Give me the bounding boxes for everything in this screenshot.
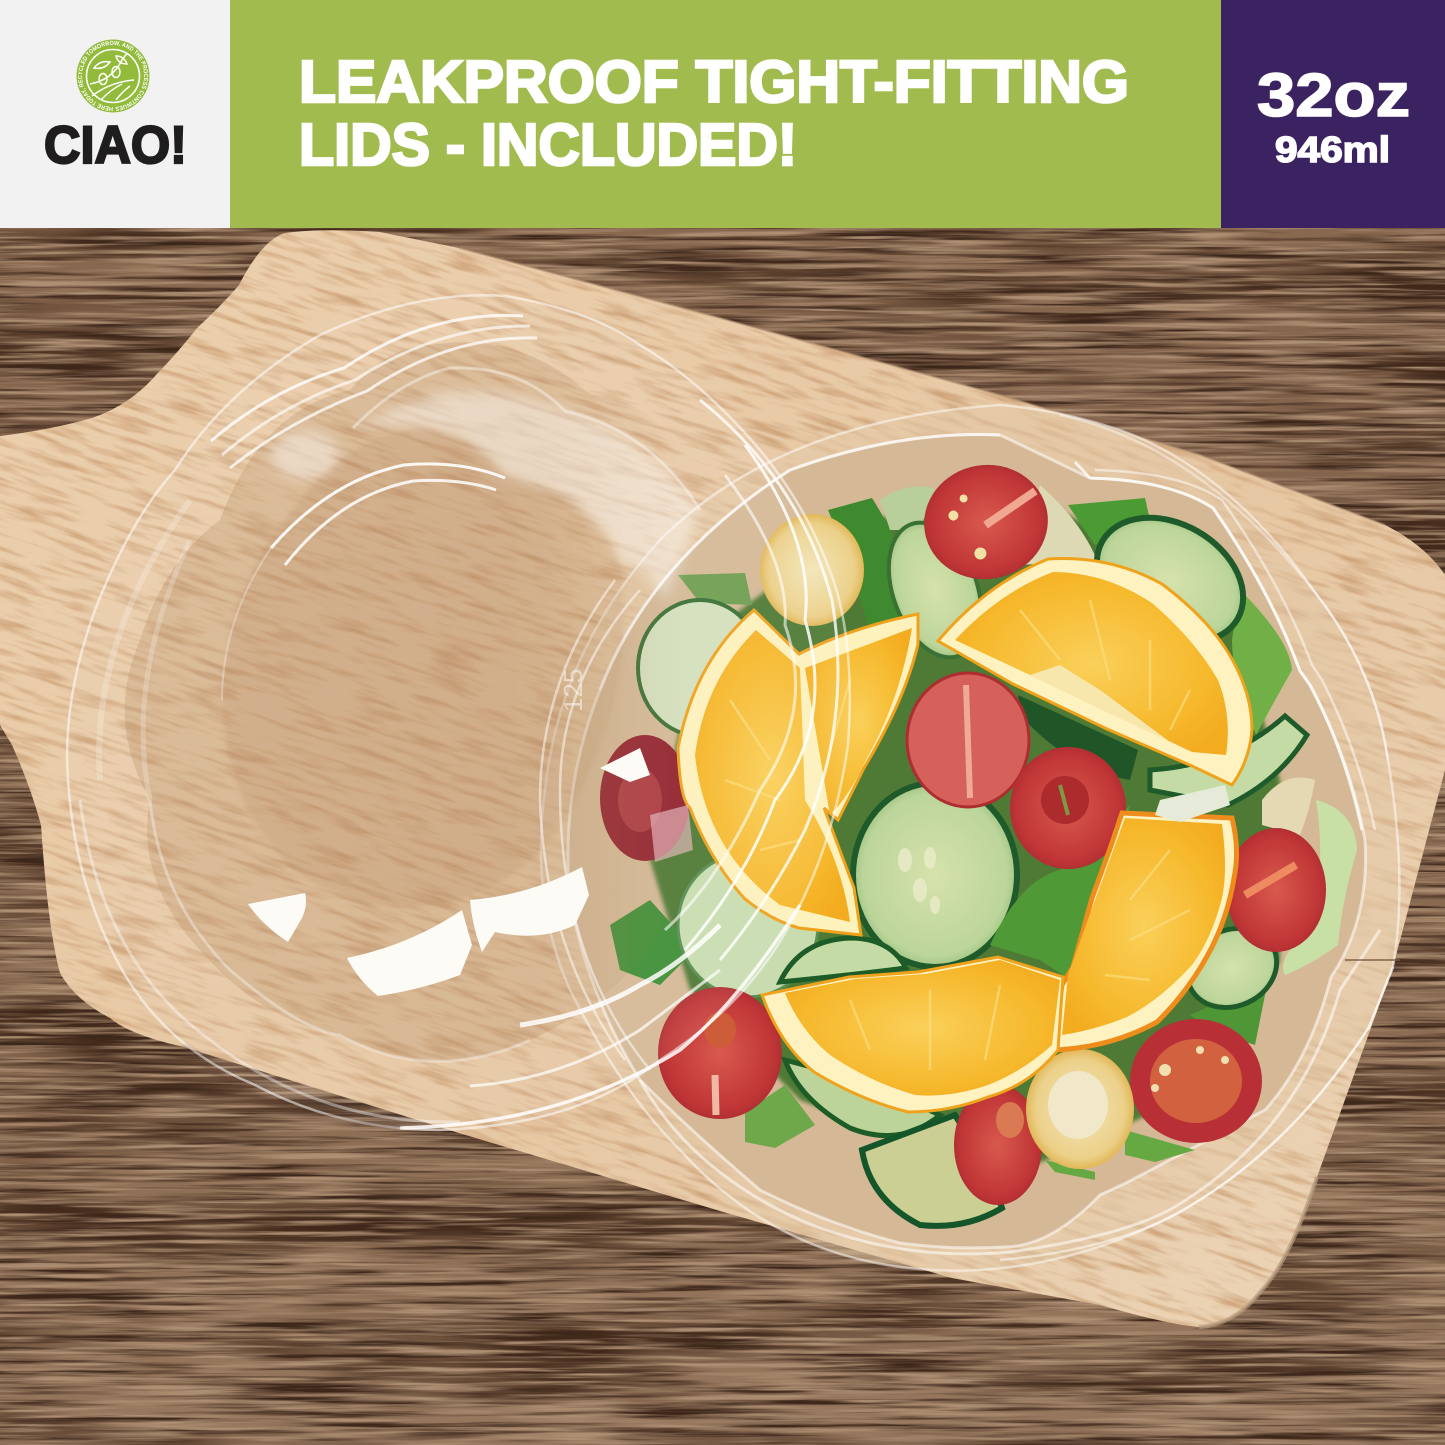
bowl rim highlights bbox=[600, 415, 1400, 1260]
bowl: clear container base bbox=[541, 405, 1399, 1271]
capacity: 32oz bbox=[1257, 61, 1410, 129]
lettuce leaves bbox=[610, 485, 1357, 1180]
orange wedges bbox=[678, 559, 1252, 1112]
yellow tomato bbox=[1026, 1049, 1134, 1169]
lid bright lobes bbox=[271, 391, 700, 600]
wedge: left bbox=[678, 610, 918, 935]
headline: LIDS - INCLUDED! bbox=[299, 112, 797, 178]
logo wordmark: CIAO! bbox=[44, 116, 187, 175]
cutting board bbox=[0, 228, 1445, 1328]
wedge: upper right bbox=[938, 559, 1252, 785]
wedge: bottom bbox=[762, 957, 1063, 1112]
size panel bbox=[1221, 0, 1445, 228]
headline panel bbox=[230, 0, 1221, 228]
yellow tomato under lid bbox=[760, 514, 864, 626]
lid outer shell bbox=[67, 295, 850, 1130]
headline: LEAKPROOF TIGHT-FITTING bbox=[299, 49, 1129, 115]
lid flower panel bbox=[125, 342, 769, 1061]
lettuce over cucumber bbox=[990, 805, 1130, 985]
capacity: 946ml bbox=[1275, 129, 1390, 170]
logo panel bbox=[0, 0, 230, 228]
wedge: right bbox=[1053, 785, 1237, 1050]
icon: recycling olive badge: HERE TODAY, RECYCLED TOMORROW. AND THE PROCESS CONTINUES bbox=[78, 40, 148, 112]
headline bbox=[299, 49, 1129, 178]
red cherry tomato halves bbox=[600, 455, 1326, 1205]
capacity bbox=[1257, 61, 1410, 170]
salad bbox=[600, 455, 1357, 1226]
lid embossed capacity mark: 125 bbox=[558, 669, 588, 712]
header bar bbox=[0, 0, 1445, 228]
lettuce base bbox=[650, 500, 1280, 1180]
cucumber slices bbox=[638, 493, 1307, 1226]
clear lid bbox=[67, 295, 850, 1130]
orange fibres bbox=[725, 600, 1190, 1070]
lid rim lines bbox=[80, 315, 838, 1128]
lid dark rim over table bbox=[184, 1047, 400, 1128]
lid glare highlights bbox=[248, 748, 650, 996]
lid centre recess bbox=[222, 428, 624, 908]
